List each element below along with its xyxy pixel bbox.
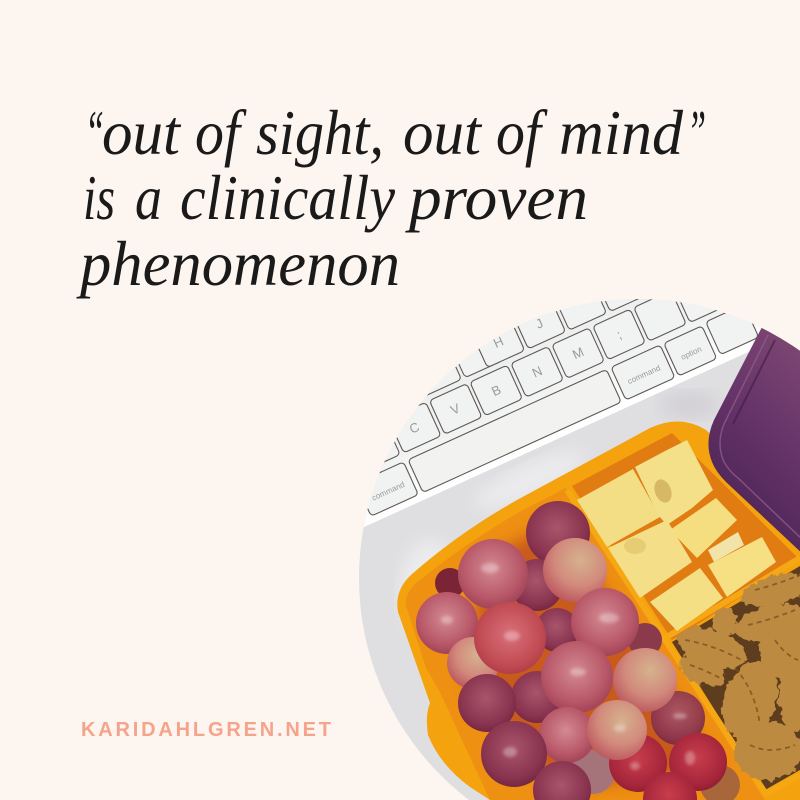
walnuts (672, 567, 800, 780)
tray dividers (567, 490, 800, 795)
heading (76, 97, 706, 299)
cheese cubes (577, 440, 776, 631)
key labels: command (370, 480, 406, 503)
website footer text: KARIDAHLGREN.NET (81, 719, 331, 741)
heading: phenomenon (76, 228, 400, 299)
heading: of (496, 97, 548, 168)
heading: is (83, 162, 115, 233)
heading: clinically (180, 162, 396, 233)
key labels: command (626, 363, 662, 386)
heading: a (135, 162, 162, 233)
key labels: M (570, 344, 586, 362)
key labels: C (407, 419, 422, 437)
key labels: V (448, 400, 463, 418)
key labels: B (489, 382, 503, 399)
key labels: ; (614, 327, 624, 342)
heading: sight, (256, 97, 384, 168)
key labels (372, 318, 702, 500)
key labels: option (680, 345, 703, 362)
walnut compartment (672, 566, 800, 790)
key labels: N (530, 363, 545, 381)
lunch box tray (397, 421, 800, 800)
marble desk (359, 352, 750, 800)
infographic canvas (76, 109, 800, 800)
heading: of (195, 97, 247, 168)
key labels: J (533, 315, 545, 332)
grape highlights (441, 563, 695, 770)
key labels: H (491, 333, 506, 351)
heading: ” (687, 97, 706, 168)
heading: out (403, 97, 483, 168)
heading: proven (405, 162, 588, 233)
purple lid (708, 327, 800, 556)
circular photo: lunch box beside keyboard (359, 299, 800, 800)
heading: out (102, 97, 182, 168)
heading: “ (85, 97, 104, 168)
grapes (416, 501, 740, 800)
heading: mind (559, 97, 684, 168)
left compartment (406, 488, 765, 800)
left compartment shaded floor (470, 520, 720, 790)
keyboard (364, 299, 762, 527)
cheese compartment (572, 433, 800, 640)
